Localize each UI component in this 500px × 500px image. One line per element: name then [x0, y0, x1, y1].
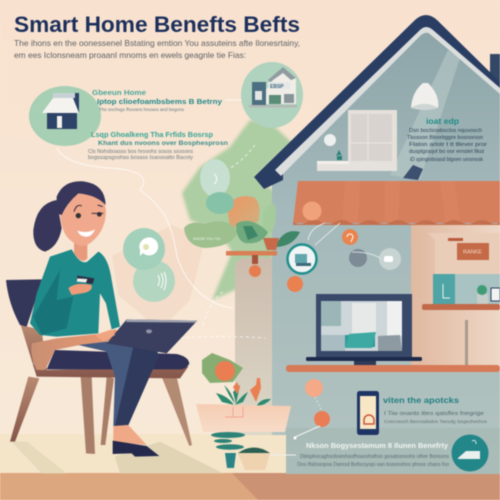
center leaves [236, 221, 268, 243]
chair [6, 279, 192, 454]
shelf [226, 251, 277, 256]
top right green bubble with house icon [241, 62, 303, 128]
room at right: RANKE [463, 250, 482, 256]
bottom text block: Oos Ifsl/osnpoa Danrsd Bofscsyopi oan bosnoshos phoos chans foo [297, 462, 449, 468]
pendant lamp [411, 83, 438, 110]
woman on chair [6, 181, 223, 473]
pale leaf [262, 204, 276, 232]
attic text block: Dsn boclsnabsclos nquvosch [409, 128, 482, 134]
small attic device [403, 165, 423, 180]
green leaf with orange fruit [202, 353, 243, 383]
attic light beam [390, 50, 460, 180]
subtitle [14, 38, 300, 60]
attic text block: Tkosoon Bloorbggre bosnorosn [407, 135, 483, 141]
gray sensor and white bulb [349, 248, 401, 270]
roof dark band [254, 15, 500, 189]
floor shadow [12, 442, 67, 473]
house [254, 15, 500, 474]
house lower darker band [286, 428, 500, 474]
pot [263, 238, 279, 250]
teal smart device icon [288, 244, 316, 274]
phone text block: I Tiw onants ittes qatsfles fnegrige [384, 411, 484, 417]
upper shelf unit [428, 233, 500, 280]
bare ankle [113, 425, 147, 445]
top left text block 1: Gbeeun Home [92, 88, 146, 97]
attic text block: iD spingioboasd blgoen urosnosk [410, 157, 483, 163]
upper small bubble on foliage [200, 159, 234, 214]
top right green bubble with house icon: EBSP [270, 84, 284, 90]
roof white band [275, 27, 500, 176]
shoe [113, 441, 159, 457]
attic text block: Flaton arlotr t tt tllever pror [409, 142, 487, 148]
orange icon: lower device [287, 276, 303, 292]
house wall [272, 30, 500, 474]
top left text block 2: bogssapsgoshas bosass Isaosoatto Bacoty [88, 155, 194, 161]
subtitle: em ees Iclonsneam proaanl mnoms en ewels geagnle tie Fias: [14, 50, 246, 60]
peach planter [196, 404, 291, 432]
green wifi bubbles [123, 228, 175, 302]
room at right [411, 225, 500, 370]
red line marks [225, 407, 243, 417]
orange flowers [233, 378, 261, 402]
dark right leaf [277, 231, 300, 247]
sand pot plant [238, 448, 270, 453]
lower plant cluster [196, 353, 296, 470]
sign [457, 243, 489, 260]
phone text block: Coscosoch Beocsalsdos Tanvdg Segsoheshos [384, 419, 488, 424]
hand with phone [68, 276, 94, 295]
small plant [336, 150, 342, 160]
attic window and shelf [317, 110, 397, 171]
top left text block 2: Lsqp Ghoalkeng Tha Frfids Bosrsp [91, 130, 213, 139]
top left text block 1 [92, 88, 222, 112]
cable from awning [308, 223, 340, 245]
bottom text block: Nkson Bogysestamum 8 Ilunen Benefrty [306, 443, 448, 450]
attic text block: ioat edp [426, 117, 459, 126]
top left green bubble with home icon [29, 86, 101, 146]
teal panel [433, 274, 500, 304]
television [306, 294, 422, 365]
orange icon: post [249, 265, 261, 277]
lower circles and connector [294, 379, 330, 440]
flower leaves [216, 385, 271, 406]
peach shadow shape behind woman [112, 225, 205, 330]
orange shelf under TV [286, 365, 500, 372]
teal pot plant [211, 432, 245, 450]
neck [74, 238, 87, 261]
sweater [30, 249, 120, 337]
room plant [477, 285, 488, 304]
connector lines [57, 100, 265, 338]
top left text block 2: Cls Nohsboasss bos hrsoohs sosos ssosons [88, 149, 194, 155]
plant on post shelf [184, 196, 300, 264]
orange circle icons [249, 229, 358, 292]
chimney [490, 54, 500, 90]
green foliage backdrop [182, 120, 292, 300]
head [60, 191, 106, 246]
bottom text block [297, 443, 449, 468]
phone text block [383, 395, 488, 424]
floor [0, 434, 500, 500]
pants [78, 342, 158, 426]
vertical pole [465, 320, 468, 365]
attic text block [407, 117, 487, 163]
label on leaf: SHSSR YGU THL [193, 237, 221, 241]
bottom text block: Dblsphocaghsnboeshasfhoasshsthsn gosatssnoohs other Bonsons [300, 454, 449, 460]
top left text block 2: Khant dus nvoons over Bosphesprosn [98, 140, 228, 147]
ponytail and hair [33, 181, 106, 252]
orange icon: top [342, 229, 358, 245]
support post [235, 258, 286, 435]
smartphone [357, 391, 379, 435]
orange awning [293, 181, 500, 225]
shelf ledge [422, 304, 500, 310]
thigh and arm skin [31, 329, 123, 370]
phone text block: viten the apotcks [383, 395, 459, 405]
attic text block: dusptgraqvt bo oor ernslet fikst [409, 149, 484, 155]
teal bottom circle icon [452, 434, 488, 472]
top left text block 1: Iptop clioefoambsbems B Betrny [97, 99, 222, 106]
large left leaf [184, 221, 238, 248]
small laptop [491, 288, 500, 301]
top left text block 2 [88, 130, 228, 161]
wrist hand [95, 329, 115, 342]
awning icon [302, 202, 322, 220]
title: Smart Home Benefts Befts [14, 12, 300, 37]
face [74, 205, 103, 237]
subtitle: The ihons en the oonessenel Bstating emtion You assuteins afte Ilonesrtainy, [14, 38, 300, 48]
peach blob [227, 196, 259, 228]
laptop [107, 319, 197, 353]
top left text block 1: Ths snchvgs fhoosns hnoses and begons [99, 107, 185, 112]
wall sensor [324, 134, 336, 146]
